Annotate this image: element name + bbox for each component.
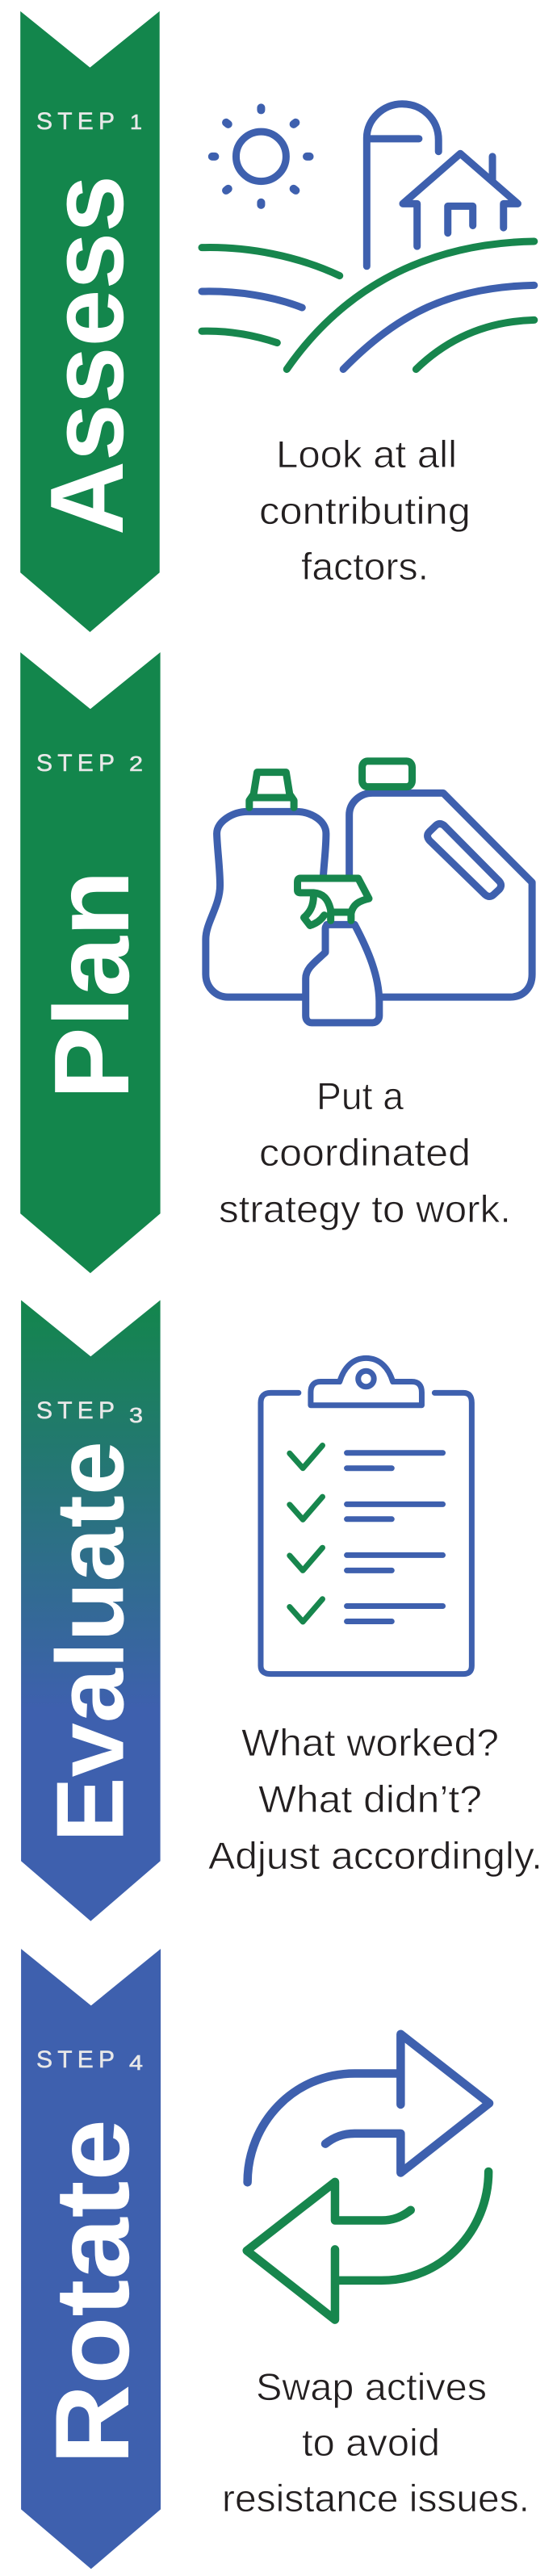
label: step 3	[36, 1397, 143, 1427]
label: step 4: 4	[129, 2050, 143, 2075]
icon part: silo	[366, 104, 438, 266]
label: step 1: 1	[130, 110, 142, 134]
icon part: jug	[350, 761, 532, 997]
icon part: clipboard	[261, 1358, 471, 1674]
text: step 4 description: Swap actives	[256, 2365, 487, 2408]
heading: evaluate: Evaluate	[37, 1441, 144, 1842]
icon part: spray bottle	[298, 878, 379, 1023]
text: step 3 description	[208, 1721, 542, 1877]
text: step 3 description: Adjust accordingly.	[208, 1834, 542, 1877]
label: step 1: STEP	[36, 108, 115, 135]
label: step 4	[36, 2046, 143, 2075]
text: step 1 description: factors.	[301, 545, 429, 588]
text: step 1 description: Look at all	[276, 433, 457, 475]
icon: chemical containers	[206, 761, 532, 1023]
icon: rotation arrows	[247, 2034, 489, 2320]
panel: step 4 rotate	[21, 1949, 530, 2569]
text: step 2 description: Put a	[316, 1074, 404, 1117]
icon part: blue arrow	[248, 2034, 489, 2182]
ribbon: step 1	[20, 11, 160, 632]
icon: farm with sun, silo, house and fields	[202, 104, 534, 369]
panel: step 1 assess	[20, 11, 534, 632]
text: step 2 description: strategy to work.	[219, 1187, 511, 1230]
icon part: green arrow	[247, 2172, 488, 2320]
ribbon: step 2	[20, 652, 161, 1273]
icon part: green check marks	[290, 1446, 322, 1622]
icon part: left field lines	[202, 248, 340, 343]
label: step 4: STEP	[36, 2046, 115, 2073]
icon part: sun	[212, 107, 310, 205]
label: step 3: STEP	[36, 1397, 115, 1424]
icon part: right field lines	[287, 241, 534, 369]
icon part: left bottle	[206, 773, 326, 997]
heading: assess: Assess	[29, 175, 145, 535]
text: step 1 description: contributing	[259, 489, 471, 532]
ribbon: step 4	[21, 1949, 161, 2569]
text: step 2 description	[219, 1074, 511, 1230]
icon: clipboard checklist	[261, 1358, 471, 1674]
icon part: house	[403, 153, 517, 246]
text: step 4 description: to avoid	[302, 2421, 440, 2464]
text: step 2 description: coordinated	[259, 1131, 471, 1174]
text: step 4 description: resistance issues.	[222, 2477, 530, 2519]
text: step 3 description: What didn’t?	[258, 1778, 482, 1820]
text: step 3 description: What worked?	[241, 1721, 499, 1764]
label: step 2: STEP	[36, 750, 115, 777]
text: step 1 description	[259, 433, 471, 588]
panel: step 3 evaluate	[21, 1301, 542, 1921]
icon part: list lines	[347, 1453, 443, 1621]
ribbon: step 3	[21, 1301, 161, 1921]
text: step 4 description	[222, 2365, 530, 2519]
panel: step 2 plan	[20, 652, 532, 1273]
label: step 2: 2	[129, 752, 143, 776]
heading: plan: Plan	[32, 870, 151, 1100]
heading: rotate: Rotate	[33, 2119, 151, 2465]
label: step 3: 3	[129, 1403, 143, 1427]
